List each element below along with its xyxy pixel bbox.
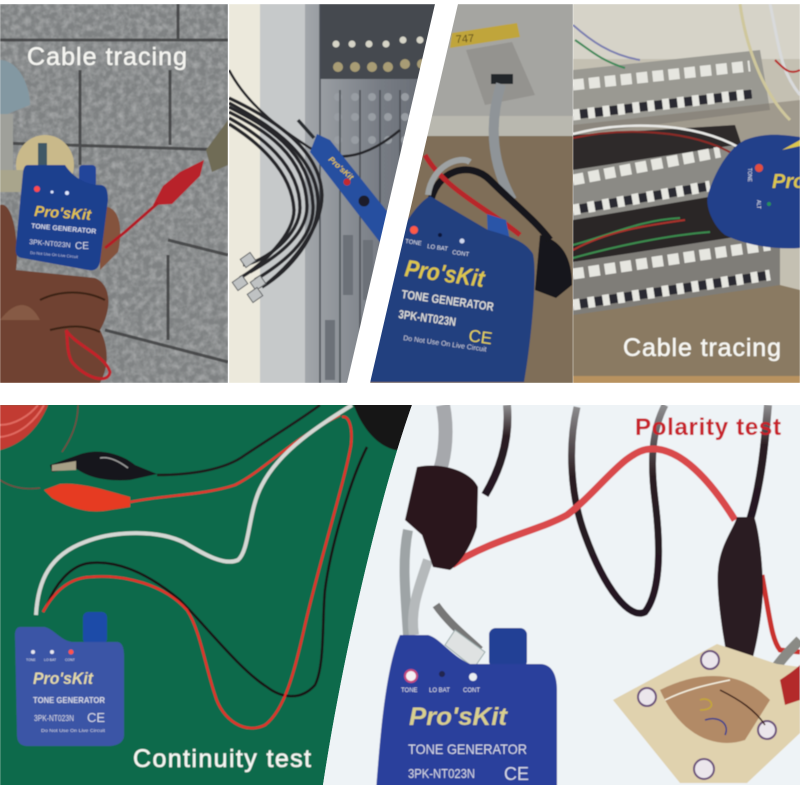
device: tracer probe head: TONE — [746, 168, 752, 182]
yellow label 747 — [450, 23, 520, 48]
BNC connectors — [232, 252, 266, 303]
heading: polarity test: Polarity test — [635, 414, 781, 441]
device: tone generator: TONE — [26, 658, 36, 662]
device: tracer probe head: ALT — [755, 200, 761, 209]
device: tone generator in hand: 3PK-NT023N — [29, 239, 71, 250]
device: tone generator in hand — [16, 165, 108, 270]
device: tone generator: Pro'sKit — [409, 703, 509, 731]
icon: grey dome fitting — [0, 60, 30, 174]
black grommet — [535, 235, 572, 298]
device: large tone generator: CE — [467, 326, 493, 348]
device: tone generator in hand: Do Not Use On Live Circuit — [30, 250, 79, 259]
heading: cable tracing: Cable tracing — [623, 334, 781, 362]
jumper wires — [573, 126, 740, 258]
icon: hand holding generator — [0, 205, 120, 383]
device: large tone generator: Do Not Use On Live Circuit — [403, 335, 487, 354]
heading: cable tracing: Cable tracing — [27, 43, 187, 71]
device: blue tracer probe — [298, 120, 390, 245]
panel: punch-down block tracing — [573, 4, 800, 383]
rack knobs — [320, 4, 427, 383]
device: tone generator: TONE — [401, 688, 418, 694]
device: tone generator: Do Not Use On Live Circuit — [41, 728, 106, 733]
bundle of colored wires — [573, 4, 800, 120]
device: tone generator: 3PK-NT023N — [408, 766, 475, 781]
wires — [36, 405, 367, 728]
icon: black alligator clip — [50, 452, 157, 480]
icon: black alligator clip — [718, 517, 763, 657]
icon: red alligator clip — [44, 484, 130, 511]
device: large tone generator: TONE — [405, 239, 422, 247]
device: large tone generator: 3PK-NT023N — [398, 307, 457, 329]
terminal rows — [573, 66, 770, 305]
panel: probe at mixing rack — [229, 4, 455, 383]
black coaxial cables — [229, 70, 400, 287]
device: large tone generator: Pro'sKit — [403, 255, 487, 293]
device: large tone generator: TONE GENERATOR — [401, 287, 495, 314]
icon: red wire spool — [0, 405, 48, 450]
panel: cable tracing on brick wall — [0, 4, 228, 383]
icon: terminal block — [613, 644, 800, 783]
grey flat cable — [494, 84, 512, 200]
icon: red loop wire — [66, 330, 110, 379]
wires behind generator — [425, 155, 550, 240]
device: tone generator: Pro'sKit — [33, 669, 94, 688]
icon: beige wall plate — [0, 135, 74, 195]
device: tone generator: TONE GENERATOR — [33, 695, 105, 705]
black felt — [353, 405, 412, 450]
icon: RJ plug — [445, 630, 485, 668]
device: tone generator: CE — [87, 710, 105, 725]
device: tone generator: CONT — [463, 688, 480, 694]
device: blue tracer probe: Pro'sKit — [327, 155, 355, 182]
device: tone generator: LO BAT — [429, 688, 450, 694]
panel: tone generator connected to wall jack — [370, 4, 573, 383]
device: tone generator: 3PK-NT023N — [34, 714, 74, 723]
wall jack plate — [466, 42, 535, 105]
device: tracer probe head — [707, 135, 800, 248]
icon: ferrite core — [405, 466, 478, 570]
device: tone generator in hand: TONE GENERATOR — [31, 223, 97, 236]
device: large tone generator — [370, 196, 535, 382]
device: large tone generator: LO BAT — [427, 244, 449, 253]
device: tone generator in hand: Pro'sKit — [34, 203, 93, 224]
device: tone generator — [15, 612, 124, 746]
device: tone generator — [376, 628, 557, 790]
cables from generator — [405, 405, 800, 685]
yellow label 747: 747 — [455, 33, 475, 46]
device: tone generator: LO BAT — [44, 658, 57, 662]
heading: continuity test: Continuity test — [133, 745, 311, 773]
panel: polarity test on white background — [320, 400, 800, 790]
test leads on mat — [0, 405, 78, 489]
device: large tone generator: CONT — [452, 250, 470, 258]
device: tone generator in hand: CE — [75, 241, 89, 252]
device: tone generator: CE — [504, 764, 529, 784]
panel: continuity test on green mat — [0, 400, 420, 790]
icon: red alligator clip — [105, 120, 228, 248]
device: tone generator: CONT — [65, 658, 76, 662]
device: tone generator: TONE GENERATOR — [408, 741, 527, 757]
